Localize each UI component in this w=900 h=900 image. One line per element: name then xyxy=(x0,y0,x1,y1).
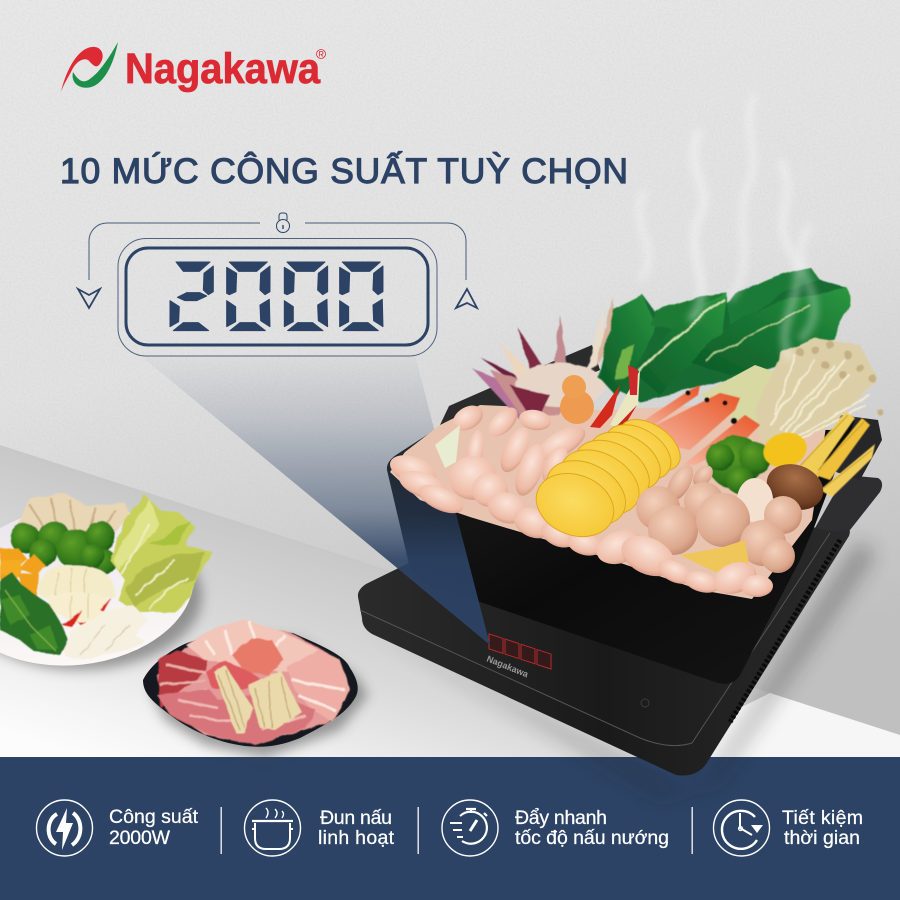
divider xyxy=(418,807,419,854)
digit 0 xyxy=(284,262,328,331)
lock icon xyxy=(276,213,290,232)
food in pot xyxy=(386,267,883,600)
text: Đẩy nhanh xyxy=(515,807,607,829)
white radish xyxy=(63,605,148,660)
vegetables xyxy=(0,493,212,660)
divider xyxy=(220,807,222,854)
seafood fan xyxy=(472,298,616,425)
text: linh hoạt xyxy=(318,827,395,849)
arrow up xyxy=(456,289,477,308)
power button xyxy=(641,699,649,707)
cooker front rim line xyxy=(360,533,830,746)
icon: power bolt xyxy=(36,800,92,856)
hot pot xyxy=(387,345,882,684)
red pepper xyxy=(590,365,640,428)
bok choy leaves xyxy=(598,267,851,402)
enoki xyxy=(18,493,130,535)
text: 2000W xyxy=(109,827,171,849)
logo wordmark: Nagakawa xyxy=(125,45,321,93)
food underlay xyxy=(390,400,830,599)
bottom pork slices xyxy=(592,524,773,600)
digit 0 xyxy=(340,262,383,331)
potato slices xyxy=(38,565,115,599)
back handle xyxy=(440,345,600,430)
table front bright area xyxy=(640,693,900,757)
cooker body xyxy=(358,525,850,776)
icon: clock xyxy=(714,800,770,856)
pumpkin xyxy=(0,548,46,600)
right bracket line xyxy=(305,223,466,280)
left bracket line xyxy=(89,223,260,280)
enoki bundle right xyxy=(248,670,302,730)
text: Đun nấu xyxy=(320,807,392,829)
cooker side vents xyxy=(730,540,840,722)
LCD power display xyxy=(78,213,477,356)
table surface xyxy=(0,445,900,757)
broccoli xyxy=(10,521,116,576)
vegetable plate xyxy=(0,493,212,677)
text: tốc độ nấu nướng xyxy=(515,827,669,849)
cooker shadow xyxy=(360,540,875,795)
bottom slices xyxy=(157,690,316,745)
feature: time saving xyxy=(714,800,863,856)
feature: flexible cooking xyxy=(244,800,395,856)
logo swoosh xyxy=(61,42,118,92)
meatballs xyxy=(636,482,802,573)
induction cooker xyxy=(358,525,875,795)
shrimps xyxy=(637,385,760,465)
broccoli xyxy=(706,435,771,494)
outer frame xyxy=(118,238,437,356)
right handle xyxy=(815,475,882,532)
cooker brand: Nagakawa xyxy=(485,654,531,680)
napa cabbage xyxy=(110,495,212,612)
digit 0 xyxy=(227,262,270,331)
back right handle xyxy=(830,415,882,480)
light beam xyxy=(140,355,490,645)
plate shadow xyxy=(150,635,368,758)
meat slices xyxy=(157,620,350,745)
logo: Nagakawa xyxy=(61,42,326,93)
plate shadow xyxy=(0,522,202,670)
red chili xyxy=(62,598,112,630)
divider xyxy=(692,807,693,854)
dark red beef xyxy=(158,650,207,708)
meat base xyxy=(157,624,350,745)
icon: pot xyxy=(244,800,300,856)
inner frame xyxy=(126,248,428,345)
enoki bundle left xyxy=(214,665,253,733)
black plate xyxy=(143,627,358,747)
feature: power 2000W xyxy=(36,800,199,856)
text: Công suất xyxy=(109,806,199,828)
text: thời gian xyxy=(784,827,860,849)
cilantro xyxy=(0,572,68,655)
mushroom xyxy=(737,456,830,522)
text: Tiết kiệm xyxy=(782,807,863,829)
enoki mushrooms xyxy=(755,338,883,445)
meat sticks xyxy=(661,461,717,505)
digit 2 xyxy=(170,262,213,331)
egg slices xyxy=(527,409,689,548)
fatty pork top xyxy=(186,620,326,672)
corn piece xyxy=(680,540,750,572)
cooker led display xyxy=(489,634,551,669)
spring onion xyxy=(435,425,460,468)
title: 10 MỨC CÔNG SUẤT TUỲ CHỌN xyxy=(60,151,628,191)
pot body xyxy=(387,420,855,684)
corn xyxy=(759,412,875,497)
pale pork slices xyxy=(386,450,605,559)
registered mark xyxy=(316,50,326,58)
cabbage heart xyxy=(700,365,775,425)
pork rolls xyxy=(449,400,591,499)
plate xyxy=(0,495,202,677)
feature: faster cooking xyxy=(442,800,669,856)
steam xyxy=(639,95,814,360)
arrow down xyxy=(78,289,100,308)
pink pork right xyxy=(287,650,350,722)
footer band xyxy=(0,757,900,900)
icon: stopwatch xyxy=(442,800,498,856)
center rolled meat xyxy=(232,638,284,675)
orange balls xyxy=(560,375,594,424)
digits 2000 xyxy=(170,262,383,331)
meat plate xyxy=(143,620,368,758)
